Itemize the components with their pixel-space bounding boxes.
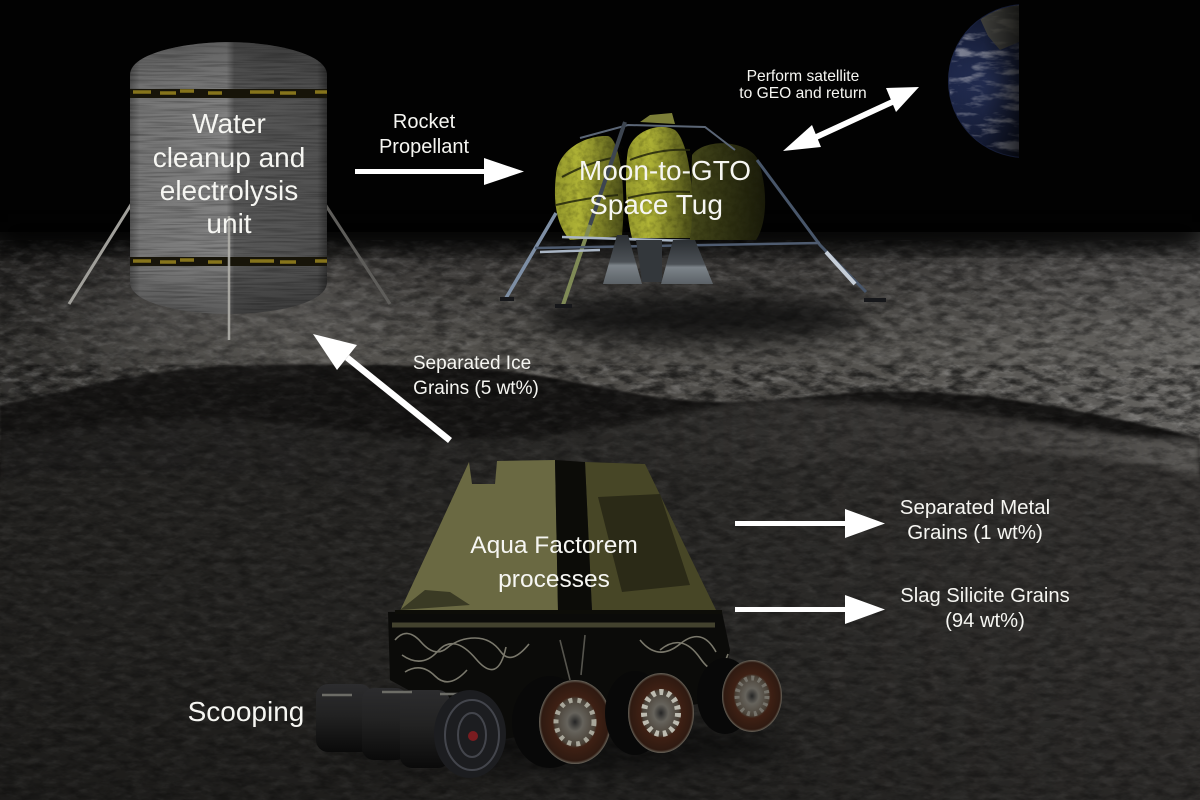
arrow: metal grains bbox=[735, 509, 885, 538]
label: space tug: Space Tug bbox=[589, 189, 723, 220]
arrow: slag grains bbox=[735, 595, 885, 624]
arrow: to GEO and return bbox=[783, 87, 919, 151]
arrow: rocket propellant bbox=[355, 158, 524, 185]
far pod and top fittings bbox=[690, 143, 765, 240]
Aqua Factorem rover bbox=[316, 460, 785, 778]
tank legs bbox=[69, 195, 390, 304]
label: slag grains: Slag Silicite Grains bbox=[900, 585, 1070, 607]
label: rocket propellant: Propellant bbox=[379, 136, 469, 158]
label: separated ice grains: Separated Ice bbox=[413, 353, 531, 374]
tug frame and struts bbox=[506, 122, 866, 305]
rover underbody bbox=[388, 612, 730, 740]
label: aqua factorem: processes bbox=[498, 566, 610, 593]
rover shadow bbox=[335, 719, 785, 771]
arrow: separated ice grains bbox=[313, 334, 452, 443]
foot pads bbox=[500, 299, 886, 306]
label: space tug: Moon-to-GTO bbox=[579, 155, 751, 186]
label: separated ice grains: Grains (5 wt%) bbox=[413, 378, 539, 399]
label: rocket propellant: Rocket bbox=[393, 111, 456, 133]
label: metal grains: Separated Metal bbox=[900, 496, 1050, 519]
yellow pods bbox=[555, 136, 623, 240]
tank ground glow bbox=[70, 282, 400, 342]
nozzles bbox=[603, 235, 642, 284]
label: metal grains: Grains (1 wt%) bbox=[907, 521, 1043, 544]
label: perform satellite: Perform satellite bbox=[747, 68, 859, 85]
middle crater slope bbox=[0, 400, 1200, 800]
background: space sky bbox=[0, 0, 1200, 260]
tug ground shadow bbox=[535, 294, 865, 342]
lunar surface backdrop bbox=[0, 222, 1200, 462]
Earth bbox=[948, 4, 1019, 158]
rover olive housing bbox=[400, 460, 558, 611]
water cleanup and electrolysis unit bbox=[69, 42, 400, 342]
label: water cleanup: Water bbox=[192, 108, 266, 139]
far crater ridge bbox=[0, 364, 1200, 800]
tank body bbox=[130, 42, 327, 314]
wheels bbox=[512, 658, 782, 768]
label: slag grains: (94 wt%) bbox=[945, 610, 1025, 632]
space tug lander bbox=[500, 113, 886, 342]
label: water cleanup: cleanup and bbox=[153, 142, 305, 173]
tank hazard bands bbox=[130, 89, 327, 98]
continent bbox=[978, 4, 1019, 50]
label: aqua factorem: Aqua Factorem bbox=[470, 532, 638, 559]
label: water cleanup: unit bbox=[206, 208, 252, 239]
label: water cleanup: electrolysis bbox=[160, 175, 298, 206]
scoop drums bbox=[316, 684, 506, 778]
label: perform satellite: to GEO and return bbox=[739, 85, 867, 102]
near regolith bbox=[0, 454, 1200, 800]
label: scooping: Scooping bbox=[188, 696, 304, 727]
regolith texture bbox=[0, 365, 1200, 800]
